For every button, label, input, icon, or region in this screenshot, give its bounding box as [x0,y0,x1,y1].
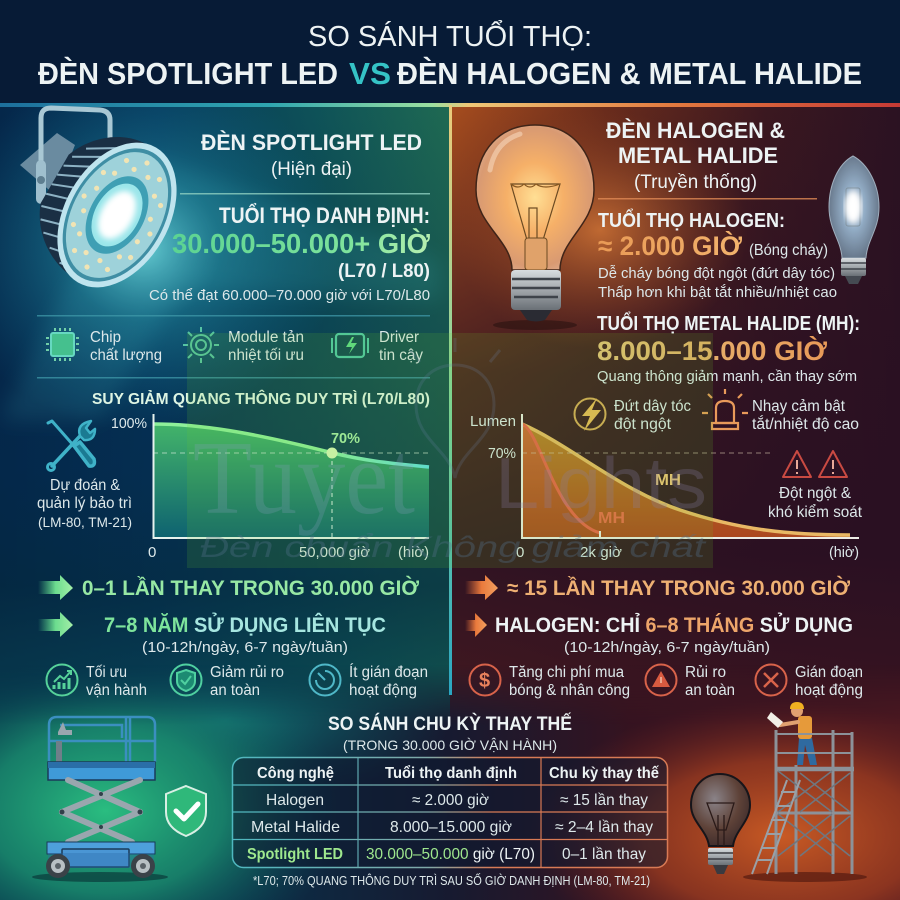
icon: warning [646,664,676,696]
cost: operation interrupted [756,664,863,699]
scissor arms [62,780,140,842]
illustration: scaffold with worker [743,702,867,882]
benefit: fewer interruptions: hoạt động [349,682,417,699]
illustration: scissor lift [32,717,168,882]
cost: safety risk: an toàn [685,682,735,699]
feature: driver: tin cậy [379,347,423,364]
feature: chip: Chip [90,329,121,346]
metal halide life: 8.000–15.000 GIỜ [597,335,827,366]
ladder [752,780,800,874]
heading: LED: ĐÈN SPOTLIGHT LED [201,130,422,155]
footnote: *L70; 70% QUANG THÔNG DUY TRÌ SAU SỐ GIỜ DANH ĐỊNH (LM-80, TM-21) [253,873,650,888]
cost: operation interrupted: Gián đoạn [795,664,863,681]
benefit: optimized operation: vận hành [86,682,147,699]
arrow: replacements [38,575,73,600]
table: replacement cycle comparison: Halogen [266,792,324,809]
feature: driver: Driver [379,329,419,346]
icon: growth chart [46,664,78,696]
worker [767,702,817,765]
background: bottom band [0,674,900,900]
chart: LED lumen maintenance curve: 70% [331,430,360,447]
table: replacement cycle comparison: Tuổi thọ danh định [385,764,517,782]
metal halide life: Quang thông giảm mạnh, cần thay sớm [597,368,857,385]
benefit: fewer interruptions: Ít gián đoạn [349,664,428,681]
title [38,19,862,91]
risk: sudden and uncontrollable: khó kiểm soát [768,504,863,521]
stat: LED years of use: 7–8 NĂM SỬ DỤNG LIÊN TỤC [104,613,386,637]
risk: sudden and uncontrollable: Đột ngột & [779,485,852,502]
predictive maintenance: (LM-80, TM-21) [38,514,132,530]
risk: filament break [574,398,691,433]
predictive maintenance [37,421,132,530]
benefit: optimized operation: Tối ưu [86,664,127,681]
chart: traditional lamp lumen decay: 2k giờ [580,544,622,561]
icon: siren [702,389,748,429]
chart: traditional lamp lumen decay: Lumen [470,413,516,430]
stat: halogen months of use [495,613,853,656]
halogen life: Thấp hơn khi bật tắt nhiều/nhiệt cao [598,284,837,301]
icon: dollar [470,664,500,696]
risk: filament break: Đứt dây tóc [614,398,691,415]
stat: traditional replacements: ≈ 15 LẦN THAY TRONG 30.000 GIỜ [507,576,850,600]
stat: halogen months of use: HALOGEN: CHỈ 6–8 THÁNG SỬ DỤNG [495,613,853,637]
icon: gauge [310,664,340,696]
chart heading: lumen maintenance: SUY GIẢM QUANG THÔNG DUY TRÌ (L70/L80) [92,390,430,408]
feature: thermal module: Module tản [228,329,304,346]
center divider [449,105,452,695]
icon: safety shield [170,664,202,696]
predictive maintenance: quản lý bảo trì [37,495,132,512]
benefit: lower risk: an toàn [210,682,260,699]
chart: LED lumen maintenance curve [111,414,429,561]
risk: switching sensitivity [702,389,859,433]
risk: switching sensitivity: Nhạy cảm bật [752,398,846,415]
title: SO SÁNH TUỔI THỌ: [308,19,592,53]
heading: Halogen and Metal Halide: (Truyền thống) [634,172,757,193]
table: replacement cycle comparison: 30.000–50.000 giờ (L70) [366,846,535,863]
risk: filament break: đột ngột [614,416,672,433]
icon: battery [332,334,368,357]
heading: Halogen and Metal Halide: METAL HALIDE [618,143,778,168]
benefit: fewer interruptions [310,664,428,699]
cost: safety risk [646,664,735,699]
arrow: months of use [465,613,487,637]
scaffold frame [776,730,854,874]
halogen life: TUỔI THỌ HALOGEN: [598,208,785,232]
chart: LED lumen maintenance curve: 50,000 giờ [299,544,370,561]
background: header band [0,0,900,105]
stat: LED years of use [104,613,386,656]
benefit: lower risk [170,664,284,699]
chart: traditional lamp lumen decay: MH [598,510,625,527]
chart: traditional lamp lumen decay [470,413,859,561]
stat: halogen months of use: (10-12h/ngày, 6-7 ngày/tuần) [564,639,770,656]
chart: traditional lamp lumen decay: 70% [488,445,516,462]
rated life block: (L70 / L80) [338,261,430,282]
rated life block: TUỔI THỌ DANH ĐỊNH: [219,203,430,228]
icon: chip [46,328,79,361]
chart: LED lumen maintenance curve: (hiờ) [398,544,429,561]
stat: LED replacements: 0–1 LẦN THAY TRONG 30.000 GIỜ [82,576,419,600]
chart: LED lumen maintenance curve: 0 [148,544,156,561]
icon: dollar: $ [479,670,490,692]
icon: green safety shield [166,786,206,836]
chart: LED lumen maintenance curve: 100% [111,415,147,432]
feature: chip [46,328,162,364]
background: LED panel [0,105,450,730]
stat: LED years of use: (10-12h/ngày, 6-7 ngày/tuần) [142,639,348,656]
metal halide life: TUỔI THỌ METAL HALIDE (MH): [597,311,860,335]
guard rails [49,717,155,762]
rated life block [149,203,430,304]
risk: sudden and uncontrollable [768,451,863,521]
table: replacement cycle comparison: 8.000–15.000 giờ [390,819,512,836]
risk: switching sensitivity: tắt/nhiệt độ cao [752,416,859,433]
icon: lightning [574,398,606,431]
heading: LED: (Hiện đại) [271,159,352,180]
icon: burnt bulb [691,774,750,874]
cost: higher cost: bóng & nhân công [509,682,630,699]
table: replacement cycle comparison: ≈ 15 lần thay [560,792,648,809]
chart: traditional lamp lumen decay: 0 [516,544,524,561]
table: replacement cycle comparison [232,758,668,868]
rated life block: 30.000–50.000+ GIỜ [172,228,430,259]
predictive maintenance: Dự đoán & [50,477,121,494]
table: replacement cycle comparison: Công nghệ [257,765,334,782]
panel: traditional lamps [465,118,863,699]
heading: replacement cycle: SO SÁNH CHU KỲ THAY THẾ [328,713,572,735]
metal halide life [597,311,860,385]
watermark [187,333,713,568]
watermark: Lights [495,444,707,524]
background: traditional lamp panel [450,105,900,730]
chart: traditional lamp lumen decay: (hiờ) [829,544,859,561]
heading: Halogen and Metal Halide: ĐÈN HALOGEN & [606,118,785,143]
heading: replacement cycle [328,713,572,753]
top accent line [0,103,900,107]
heading: LED [201,130,422,180]
cost: operation interrupted: hoạt động [795,682,863,699]
benefit: lower risk: Giảm rủi ro [210,664,284,681]
feature: thermal module [183,327,304,364]
watermark: Đèn chuẩn Không giảm chất [200,531,707,564]
halogen life [598,208,837,301]
icon: wrench and screwdriver [48,421,95,470]
cost: higher cost: Tăng chi phí mua [509,664,624,681]
feature: thermal module: nhiệt tối ưu [228,347,304,364]
icon: LED spotlight [16,108,201,309]
icon: warning triangles [783,451,847,477]
icon: heat sun [183,327,219,363]
halogen life: ≈ 2.000 GIỜ [598,230,742,261]
title: ĐÈN HALOGEN & METAL HALIDE [397,56,862,91]
heading: replacement cycle: (TRONG 30.000 GIỜ VẬN HÀNH) [343,737,557,753]
icon: cross [756,664,786,696]
watermark: Tuyet [193,419,415,536]
table: replacement cycle comparison: Spotlight LED [247,846,343,863]
halogen life: Dễ cháy bóng đột ngột (đứt dây tóc) [598,265,835,282]
table: replacement cycle comparison: ≈ 2.000 giờ [412,792,489,809]
cost: higher cost [470,664,630,699]
arrow: years of use [38,612,73,637]
cost: safety risk: Rủi ro [685,664,726,681]
chart: traditional lamp lumen decay: MH [655,472,681,489]
table: replacement cycle comparison: Chu kỳ thay thế [549,765,659,782]
heading: Halogen and Metal Halide [606,118,785,193]
arrow: replacements [465,575,498,600]
title: ĐÈN SPOTLIGHT LED [38,56,338,91]
halogen life: (Bóng cháy) [749,242,828,259]
table: replacement cycle comparison: Metal Halide [251,819,340,836]
benefit: optimized operation [46,664,147,699]
icon: halogen bulb [476,125,594,330]
panel: LED spotlight [37,130,430,699]
icon: metal halide bulb [829,156,879,284]
table: replacement cycle comparison: 0–1 lần thay [562,846,646,863]
title: VS [349,56,391,91]
rated life block: Có thể đạt 60.000–70.000 giờ với L70/L80 [149,287,430,304]
light beam [0,107,440,427]
table: replacement cycle comparison: ≈ 2–4 lần thay [555,819,653,836]
feature: chip: chất lượng [90,347,162,364]
feature: driver [332,329,423,364]
